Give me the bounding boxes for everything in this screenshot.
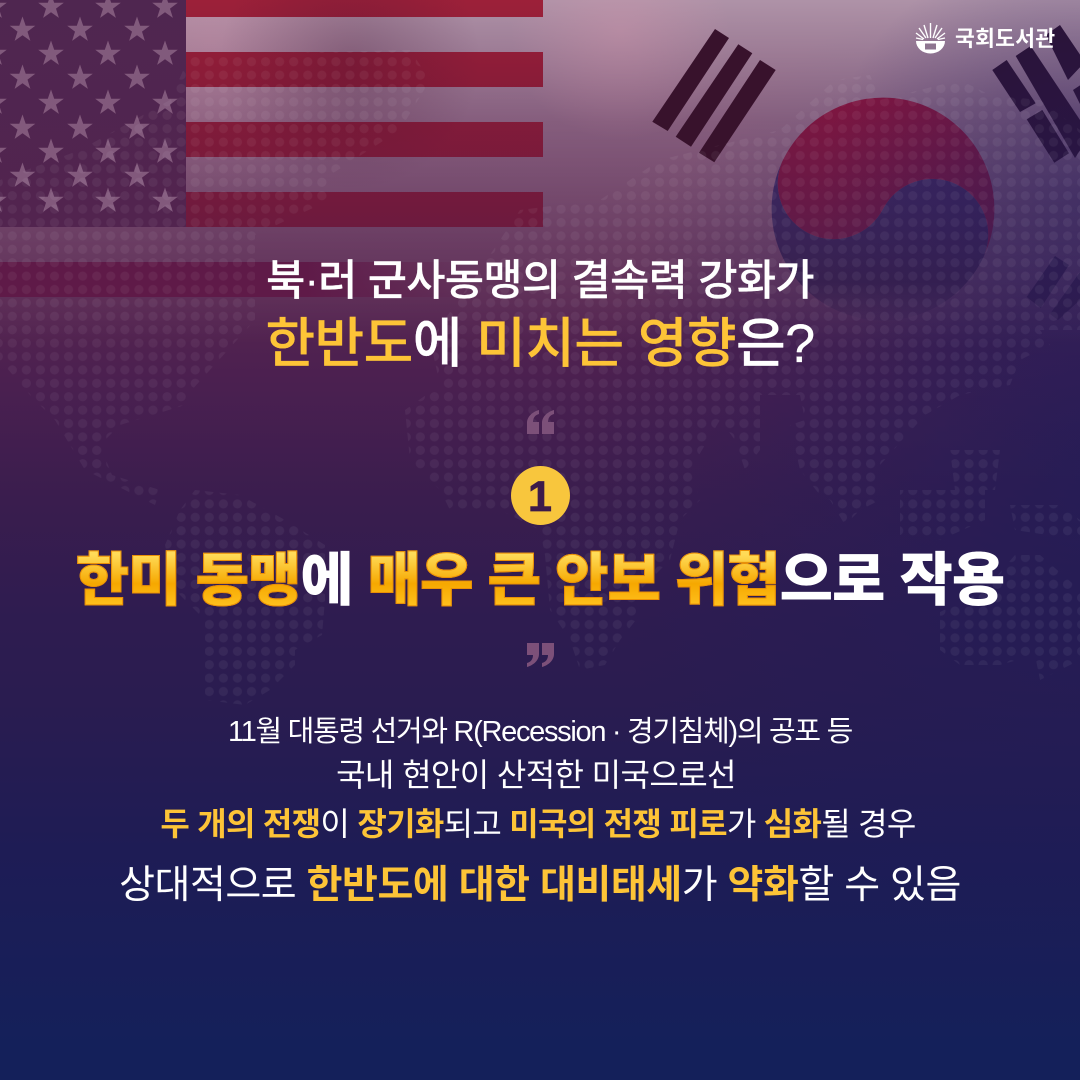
logo emblem bbox=[916, 23, 945, 53]
body text line 3: 두 개의 전쟁이 장기화되고 미국의 전쟁 피로가 심화될 경우 bbox=[160, 806, 916, 842]
number badge 1: 1 bbox=[528, 473, 552, 521]
logo text: 국회도서관 bbox=[955, 27, 1055, 51]
dotted world map bbox=[0, 0, 1080, 720]
body text line 4: 상대적으로 한반도에 대한 대비태세가 약화할 수 있음 bbox=[119, 864, 961, 907]
background illustration: flags and dotted world map bbox=[0, 0, 1080, 798]
body text line 1: 11월 대통령 선거와 R(Recession · 경기침체)의 공포 등 bbox=[228, 716, 852, 748]
icon: opening quotation mark bbox=[527, 410, 554, 434]
headline: 한미 동맹에 매우 큰 안보 위협으로 작용 bbox=[76, 548, 1004, 613]
icon: American flag bbox=[0, 0, 543, 297]
body text line 2: 국내 현안이 산적한 미국으로선 bbox=[336, 757, 736, 793]
icon: closing quotation mark bbox=[527, 643, 554, 667]
title line 2: 한반도에 미치는 영향은? bbox=[265, 314, 815, 374]
number badge 1 bbox=[511, 466, 570, 525]
icon: Korean flag bbox=[652, 25, 1080, 320]
title line 1: 북·러 군사동맹의 결속력 강화가 bbox=[266, 258, 814, 305]
